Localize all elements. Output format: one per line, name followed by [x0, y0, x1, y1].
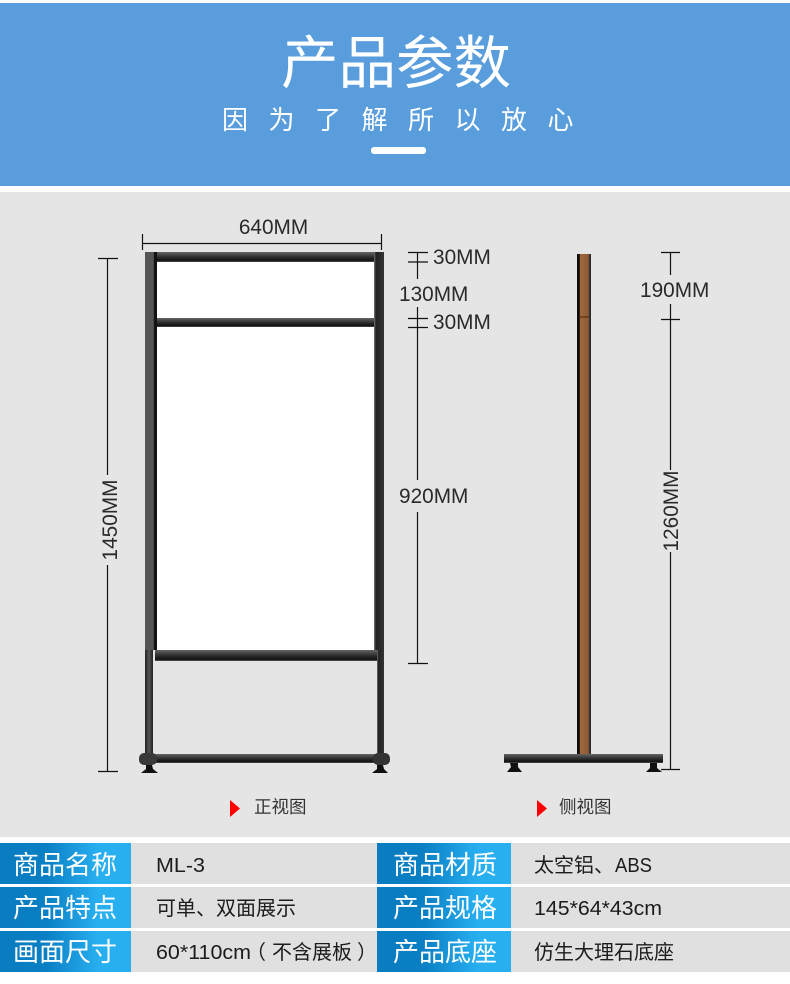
dimension: 1450MM height — [98, 258, 122, 772]
caption: side view: 侧视图 — [559, 794, 612, 819]
spec row 3: 仿生大理石底座 — [534, 941, 674, 964]
subtitle: 因为了解所以放心 — [222, 100, 594, 137]
spec row 3: 不含展板 — [272, 941, 352, 964]
header banner — [0, 3, 790, 186]
spec row 2: 产品规格 — [393, 888, 497, 925]
spec row 1: 商品名称 — [13, 845, 117, 882]
dimension: front right column: 30MM — [433, 246, 491, 269]
spec row 3: ） — [357, 941, 377, 964]
spec row 3 — [0, 931, 790, 972]
spec row 3: （ — [246, 941, 266, 964]
caption: front view — [230, 794, 306, 819]
spec row 3: 60*110cm — [156, 942, 251, 964]
spec row 2: 可单、双面展示 — [156, 897, 296, 920]
header accent bar — [371, 147, 426, 154]
dimension: front right column — [399, 246, 491, 664]
spec row 1 — [0, 843, 790, 884]
dimension: 640MM width: 640MM — [239, 216, 308, 239]
front view frame — [139, 252, 390, 773]
caption: front view: 正视图 — [254, 794, 306, 819]
dimension: 1450MM height: 1450MM — [99, 480, 122, 560]
spec row 1: ABS — [615, 855, 652, 877]
title: 产品参数 — [281, 16, 511, 100]
dimension: front right column: 30MM — [433, 311, 491, 334]
spec row 1: ML-3 — [156, 855, 205, 877]
side view stand — [504, 254, 663, 772]
dimension: 640MM width — [142, 216, 382, 250]
dimension: front right column: 130MM — [399, 283, 468, 306]
spec row 1: 商品材质 — [393, 845, 497, 882]
spec row 2: 产品特点 — [13, 888, 117, 925]
spec row 3: 产品底座 — [393, 932, 497, 969]
spec row 3: 画面尺寸 — [13, 932, 117, 969]
spec row 1: 太空铝、 — [534, 855, 614, 877]
dimension: side view heights: 1260MM — [660, 471, 683, 551]
dimension: side view heights — [640, 252, 709, 770]
dimension: side view heights: 190MM — [640, 279, 709, 302]
dimension: front right column: 920MM — [399, 485, 468, 508]
panel: product diagrams — [0, 192, 790, 837]
spec row 2: 145*64*43cm — [534, 898, 662, 920]
spec row 2 — [0, 887, 790, 928]
